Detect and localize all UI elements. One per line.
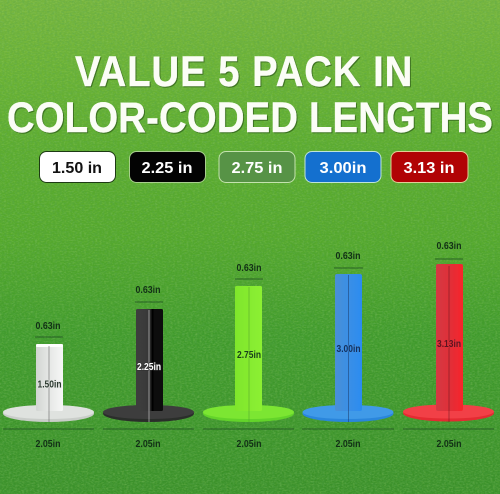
tee: white 1.50 in: 1.50in (38, 380, 62, 390)
tee: blue 3.00 in: 3.00in (336, 344, 360, 355)
pill: 1.50 in (40, 152, 116, 182)
tee: black 2.25 in (103, 285, 194, 450)
tee: black 2.25 in: 2.05in (136, 439, 160, 450)
tee: blue 3.00 in (302, 251, 394, 450)
title: COLOR-CODED LENGTHS (7, 93, 493, 142)
pill: 2.25 in (130, 152, 206, 182)
tee: green 2.75 in: 2.05in (236, 439, 262, 450)
tee: green 2.75 in: 0.63in (236, 263, 262, 274)
tee: green 2.75 in: 2.75in (237, 350, 261, 361)
pill: 2.75 in (219, 152, 295, 182)
pill: 2.25 in: 2.25 in (142, 160, 192, 177)
tee: black 2.25 in: 2.25in (137, 362, 161, 373)
tee: black 2.25 in: 0.63in (136, 285, 160, 296)
pill: 3.00 in (305, 152, 381, 182)
tee: green 2.75 in (203, 263, 294, 450)
pill: 3.13 in (391, 152, 468, 182)
length legend pills (40, 152, 468, 182)
tee: red 3.13 in (403, 241, 494, 450)
pill: 1.50 in: 1.50 in (52, 160, 102, 177)
pill: 3.13 in: 3.13 in (404, 160, 454, 177)
tee: white 1.50 in: 0.63in (36, 321, 60, 332)
tee: white 1.50 in: 2.05in (36, 439, 60, 450)
pill: 3.00 in: 3.00in (320, 160, 366, 177)
tee: red 3.13 in: 0.63in (436, 241, 462, 252)
tee: blue 3.00 in: 2.05in (336, 439, 360, 450)
tee: white 1.50 in (3, 321, 94, 450)
tee: blue 3.00 in: 0.63in (336, 251, 360, 262)
pill: 2.75 in: 2.75 in (232, 160, 282, 177)
title (7, 47, 493, 142)
tee: red 3.13 in: 3.13in (437, 339, 461, 350)
tee: red 3.13 in: 2.05in (436, 439, 462, 450)
title: VALUE 5 PACK IN (75, 47, 412, 96)
